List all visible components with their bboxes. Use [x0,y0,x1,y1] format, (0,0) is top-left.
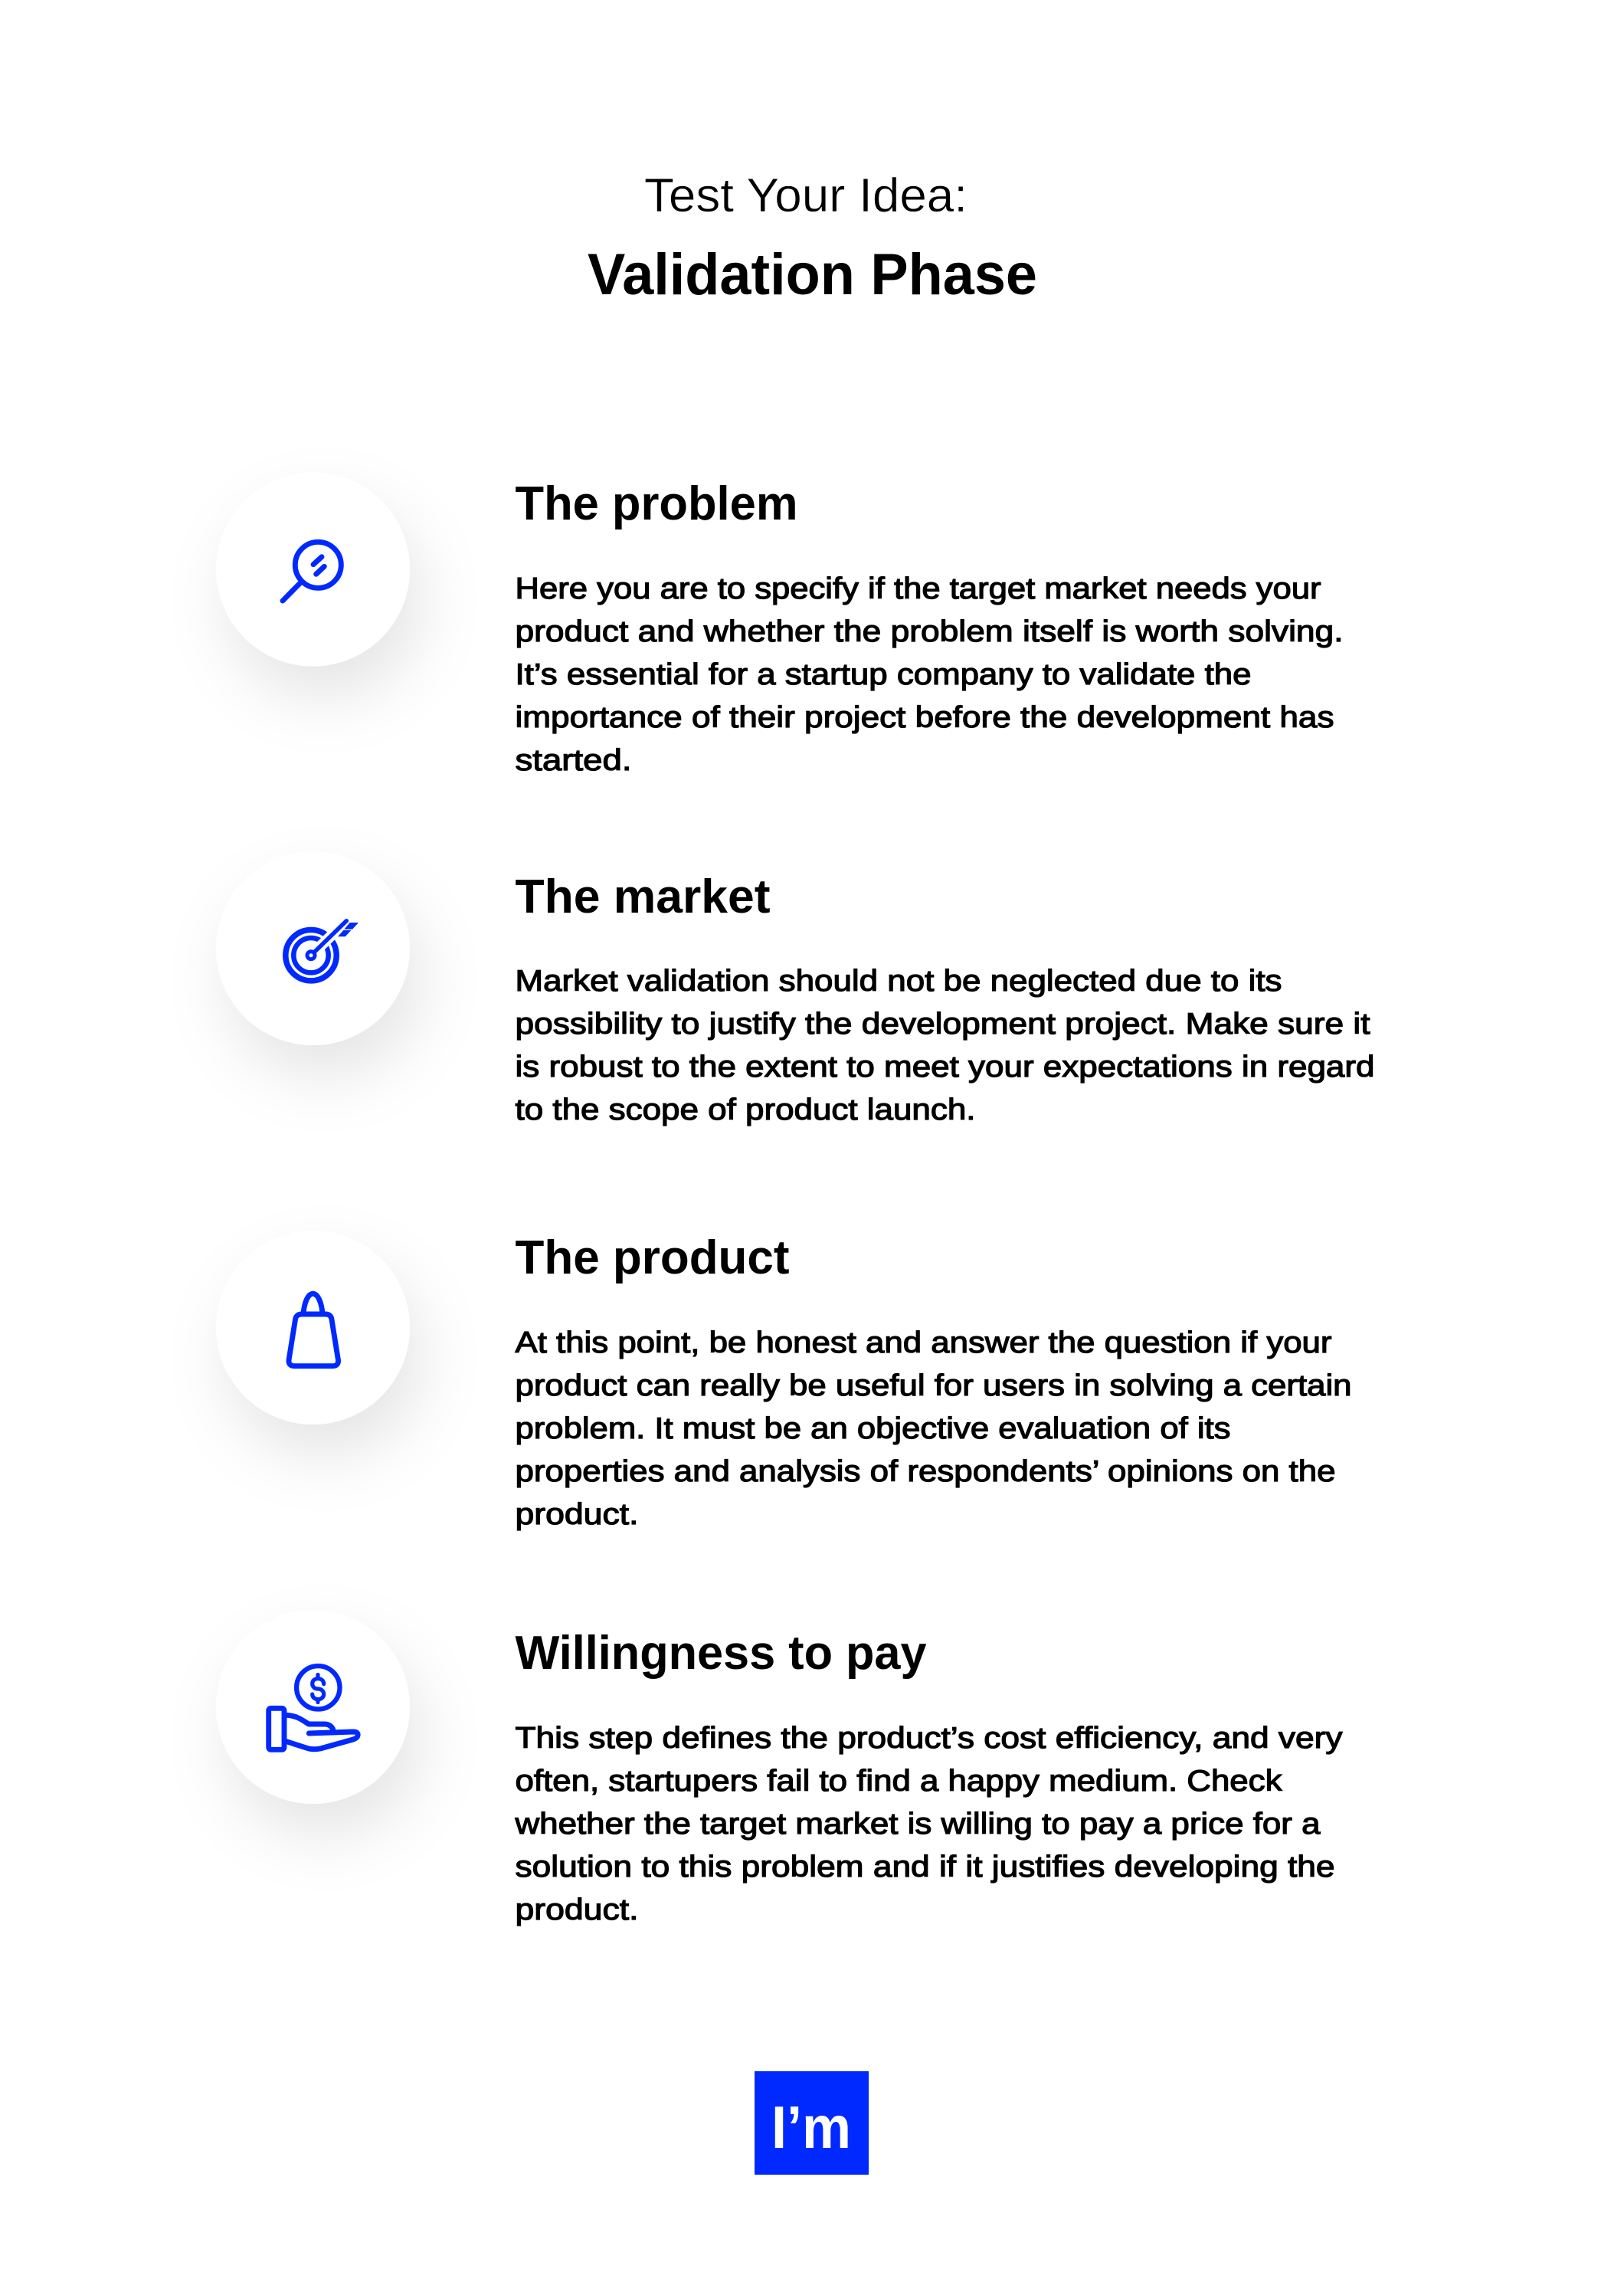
icon: hand with coin [269,1666,358,1749]
logo: I'm [755,2071,869,2175]
icon: shopping bag [289,1293,339,1366]
text block: the market: Market validation should not be neglected due to its [515,965,1282,998]
icon circle: problem [216,472,410,667]
text block: the product: At this point, be honest and answer the question if your [515,1326,1331,1359]
text block: the product: properties and analysis of respondents’ opinions on the [515,1455,1336,1488]
text block: the problem: Here you are to specify if the target market needs your [515,572,1321,605]
text block: willingness to pay: product. [515,1893,639,1926]
title line: Test Your Idea: Test Your Idea: [644,169,968,222]
text block: the market [515,965,1374,1126]
text block: the product: problem. It must be an objective evaluation of its [515,1412,1230,1445]
text block: the market: possibility to justify the development project. Make sure it [515,1008,1370,1041]
icon circle: market [216,851,410,1045]
panel: the product [216,1231,1351,1531]
text block: the product: product can really be useful for users in solving a certain [515,1369,1351,1402]
text block: the problem: importance of their project before the development has [515,701,1334,734]
title line: Validation Phase: Validation Phase [588,242,1037,307]
text block: the market: is robust to the extent to meet your expectations in regard [515,1051,1374,1084]
text block: willingness to pay: whether the target market is willing to pay a price for a [514,1808,1321,1841]
icon circle: product [216,1231,410,1425]
heading: the market: The market [515,870,771,923]
icon circle: willingness to pay [216,1610,410,1804]
panel: the problem [216,472,1344,777]
heading: willingness to pay: Willingness to pay [515,1627,927,1680]
text block: the market: to the scope of product launch. [515,1093,976,1126]
icon: magnifier [283,542,341,601]
text block: the problem [515,572,1344,777]
title [588,169,1037,307]
text block: the product [515,1326,1351,1531]
panel: willingness to pay [216,1610,1343,1926]
heading: the product: The product [515,1231,789,1284]
text block: the problem: product and whether the problem itself is worth solving. [515,615,1344,648]
icon: target with arrow [286,921,359,981]
heading: the problem: The problem [515,477,798,530]
text block: willingness to pay: often, startupers fail to find a happy medium. Check [515,1765,1282,1798]
text block: the problem: It’s essential for a startup company to validate the [515,658,1252,691]
text block: the product: product. [515,1498,639,1531]
logo: I'm: I’m [771,2093,851,2161]
text block: willingness to pay: solution to this problem and if it justifies developing the [515,1851,1334,1883]
text block: willingness to pay: This step defines the product’s cost efficiency, and very [515,1722,1343,1755]
text block: willingness to pay [514,1722,1343,1926]
text block: the problem: started. [515,744,631,777]
panel: the market [216,851,1374,1126]
